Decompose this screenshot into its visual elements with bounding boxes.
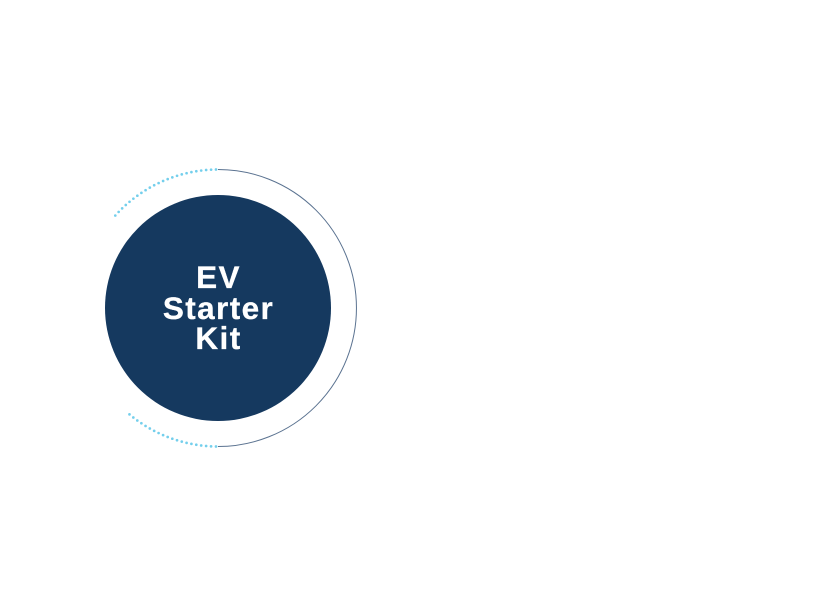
dotted arc: bottom left (129, 414, 216, 446)
dotted arc: top left (114, 170, 216, 217)
title: EV Starter Kit: Kit (195, 320, 242, 356)
central circle (105, 195, 331, 421)
title: EV Starter Kit: EV (196, 259, 241, 295)
title: EV Starter Kit (163, 259, 274, 356)
outer ring arc (218, 170, 356, 446)
title: EV Starter Kit: Starter (163, 290, 274, 326)
